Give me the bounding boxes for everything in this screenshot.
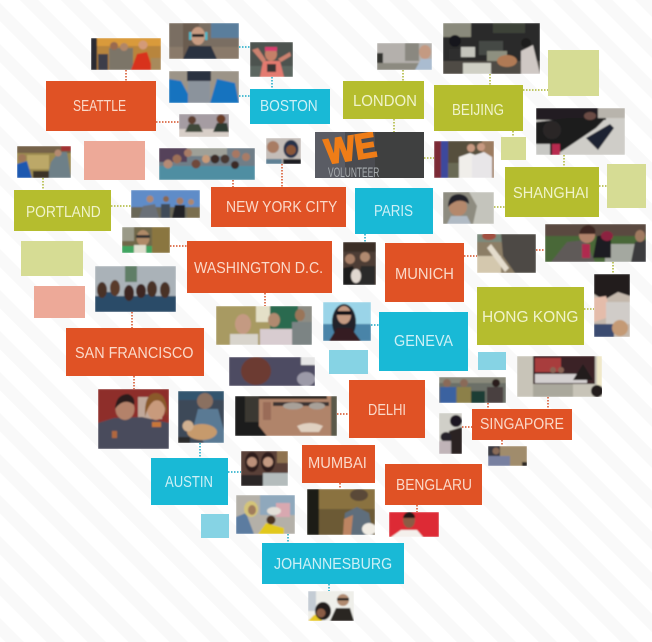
box: Seattle [46,81,156,131]
photo: Munich crafts [477,234,536,273]
photo: Shanghai kids laptop [536,108,625,155]
box: Benglaru [385,464,482,505]
box: Portland: PORTLAND [26,204,101,221]
box: Delhi [349,380,425,438]
pale square: cyan 1 [329,350,368,374]
pale square: salmon 2 [34,286,85,318]
box: Portland [14,190,111,231]
photo: Paris child [443,192,494,224]
photo: man with headphones [169,23,239,59]
photo: Washington group [216,306,312,345]
photo: Portland volunteers [17,146,71,178]
box: Munich: MUNICH [395,266,454,283]
photo: Singapore presentation screen [517,356,602,397]
photo: WE Volunteer shirt [315,126,424,181]
box: San Francisco: SAN FRANCISCO [75,345,193,362]
pale square: lime top right [548,50,599,96]
photo: t-shirt [229,357,315,386]
photo: Bengaluru man on red [389,512,439,537]
box: London: LONDON [353,93,417,110]
box: Singapore: SINGAPORE [480,416,564,433]
box: Beijing: BEIJING [452,102,504,119]
photo: Singapore bottom [488,446,527,466]
photo: London woman [377,43,432,70]
photo: San Francisco group [95,266,176,312]
box: Washington D.C.: WASHINGTON D.C. [194,260,323,277]
box: Hong Kong [477,287,584,345]
photo: Beijing two women in white [434,141,494,178]
box: London [343,81,424,119]
box: Boston: BOSTON [260,98,318,115]
pale square: lime right [607,164,646,208]
photo: Mumbai woman [307,489,375,535]
photo: Geneva woman with sunglasses [323,302,371,341]
box: Delhi: DELHI [368,402,406,419]
photo: WE Volunteer shirt: VOLUNTEER [328,166,379,181]
box: Geneva [379,312,468,371]
photo: Boston man in pink [250,42,293,77]
photo: Seattle volunteers [91,38,161,70]
box: Beijing [434,85,523,131]
pale square: cyan 3 [201,514,229,538]
box: Johannesburg [262,543,404,584]
box: New York City: NEW YORK CITY [226,199,337,216]
photo: San Francisco two women [98,389,169,449]
box: Shanghai [505,167,599,217]
box: Paris: PARIS [374,203,413,220]
box: Geneva: GENEVA [394,333,453,350]
photo: Singapore left [439,413,462,454]
box: Munich [385,243,464,302]
photo: Singapore three people [439,377,506,403]
photo: Austin two women [241,451,288,486]
photo: Washington man [122,227,170,253]
photo: WE Volunteer shirt: WE [322,126,379,172]
box: Boston [250,89,330,124]
photo: Paris group [343,242,376,285]
photo: Hong Kong girl [594,274,630,337]
box: Johannesburg: JOHANNESBURG [274,556,392,573]
box: Mumbai: MUMBAI [308,455,367,472]
box: Paris [355,188,433,234]
photo: man with dog [178,391,224,443]
box: Seattle: SEATTLE [73,97,126,114]
box: Singapore [472,409,572,440]
photo: man in glasses close-up [235,396,337,436]
photo: Beijing group [443,23,540,74]
photo: Portland group [131,190,200,218]
box: Hong Kong: HONG KONG [482,309,578,326]
photo: Johannesburg kids [236,495,295,534]
photo: Hong Kong woman outdoors [545,224,646,262]
pale square: cyan 2 [478,352,506,370]
box: Shanghai: SHANGHAI [513,185,589,202]
photo: Johannesburg bottom [308,591,354,621]
pale square: lime small [501,137,526,160]
photo: New York two women [266,138,301,164]
photo: blue bags [169,71,239,103]
box: Mumbai [302,445,375,483]
box: Austin [151,458,228,505]
box: New York City [211,187,346,227]
box: San Francisco [66,328,204,376]
box: Austin: AUSTIN [165,474,213,491]
pale square: salmon 1 [84,141,145,180]
box: Benglaru: BENGLARU [396,477,472,494]
box: Washington D.C. [187,241,332,293]
photo: Seattle two women [179,114,229,137]
photo: New York group [159,148,255,180]
pale square: lime 1 [21,241,83,276]
